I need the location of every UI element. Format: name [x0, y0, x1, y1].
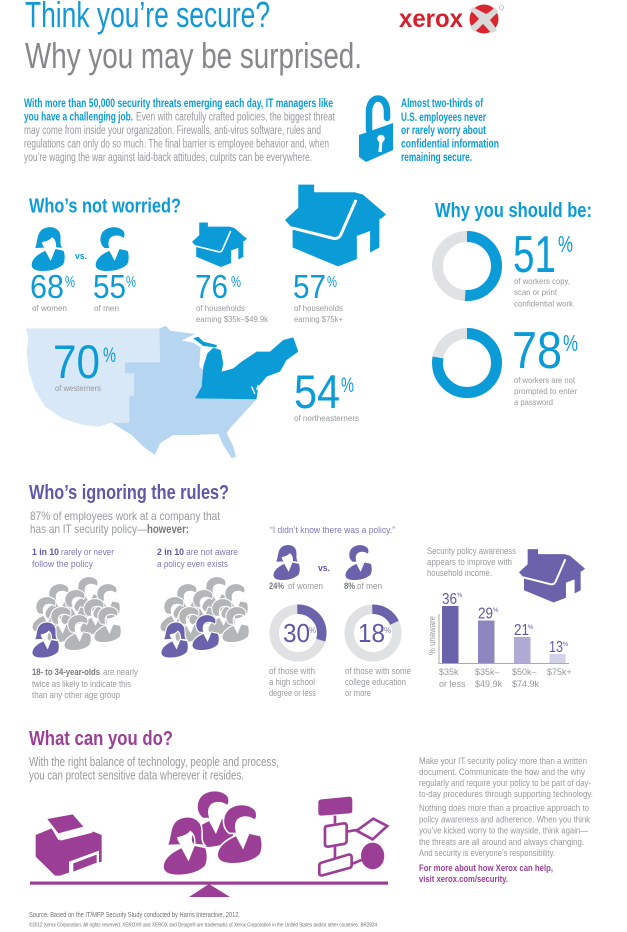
bar categories: $50k– [512, 667, 537, 677]
copyright: ©2012 Xerox Corporation. All rights reserved. XEROX® and XEROX and Design® are trademarks of Xerox Corporation in the United States and/or other countries. BR2824 [29, 922, 377, 928]
stat: 54% of northeasterners: of northeasterners [294, 413, 359, 423]
bar values: 13 [549, 639, 563, 656]
text: right balance: you can protect sensitive data wherever it resides. [29, 768, 244, 782]
text: 87% of employees: 87% of employees work at a company that [30, 509, 221, 523]
icon: people [164, 791, 261, 875]
text: right balance [29, 755, 279, 782]
stat: 70% of westerners: of westerners [55, 383, 101, 393]
bar categories [439, 667, 572, 689]
stat: 78% of workers: prompted to enter [514, 386, 577, 396]
text: 18- to 34-year-olds: than any other age group [32, 690, 120, 700]
stat: 57% of households: % [327, 274, 337, 291]
text: 87% of employees: has an IT security policy— [30, 522, 147, 536]
bar values: % [493, 608, 499, 614]
bar values: 36 [442, 591, 457, 608]
intro text: you have a challenging job. [24, 112, 133, 124]
stat: 70% of westerners: % [103, 344, 116, 367]
quote: didn't know: “I didn’t know there was a policy.” [270, 525, 395, 536]
stat: 51% of workers: confidential work [514, 298, 574, 308]
text: security policy awareness [427, 546, 516, 578]
text: 18- to 34-year-olds [32, 667, 138, 700]
bar values: % [528, 625, 534, 631]
text: 8% of men: of men [357, 581, 382, 591]
caption: high school: degree or less [269, 688, 316, 698]
icon: big house [285, 185, 386, 266]
stat: 78% of workers: a password [514, 397, 553, 407]
callout: two-thirds of employees: or rarely worry about [401, 125, 486, 137]
intro text: you’re waging the war against laid-back attitudes, culprits can be everywhere. [24, 152, 312, 164]
stat: 51% of workers [513, 226, 574, 308]
heading: who's not worried: Who’s not worried? [29, 196, 181, 218]
caption: some college: college education [345, 677, 406, 687]
text: 24% of women: of women [288, 581, 323, 591]
caption: high school: a high school [269, 677, 315, 687]
axis label: % unaware [427, 616, 437, 655]
icon: purple house [519, 549, 585, 603]
caption: some college [345, 666, 411, 698]
text: 1 in 10 [32, 547, 114, 569]
title: Why you may be surprised. [25, 35, 362, 76]
icon: man purple [346, 545, 372, 580]
bar categories: $35k– [475, 667, 500, 677]
callout: two-thirds of employees [401, 98, 499, 164]
stat: 51% of workers: % [558, 231, 573, 257]
crowd: one in ten [33, 577, 121, 658]
title [25, 0, 362, 76]
stat: 78% of workers: 78 [512, 322, 562, 380]
intro text: regulations can only do so much. The final barrier is employee behavior and, when [24, 138, 329, 150]
text: security policy awareness: Security policy awareness [427, 546, 516, 556]
caption: some college: of those with some [345, 666, 411, 676]
bar values: 29 [478, 606, 493, 622]
region: midwest and south [112, 326, 257, 458]
donut: 30%: % [309, 626, 316, 635]
stat: 76% of households: 76 [195, 268, 228, 305]
bar values [442, 591, 569, 656]
heading: who's ignoring the rules: Who’s ignoring the rules? [29, 482, 229, 504]
text: 87% of employees: however: [147, 522, 189, 536]
balance scale [30, 882, 388, 897]
icon: woman purple [274, 545, 300, 580]
icon: padlock [359, 98, 393, 162]
text: make your IT security policy [419, 756, 593, 858]
stat: 54% of northeasterners: 54 [294, 365, 340, 418]
text: make your IT security policy: to-day procedures through supporting technology. [419, 789, 593, 799]
donut: 18%: 18 [358, 618, 385, 648]
intro text: may come from inside your organization. Firewalls, anti-virus software, rules and [24, 125, 321, 137]
text: 24% of women [269, 581, 323, 591]
stat: 57% of households [293, 268, 343, 324]
donut: 18% [349, 609, 397, 657]
text: security policy awareness: appears to improve with [427, 557, 512, 567]
axis lines [439, 614, 569, 664]
donut: 30% [274, 609, 322, 657]
text: right balance: With the right balance of technology, people and process, [29, 755, 279, 769]
bar categories: $49.9k [475, 679, 503, 689]
source: Source: Based on the IT/MFP Security Study conducted by Harris Interactive, 2012. [29, 912, 240, 919]
bar values: % [563, 642, 569, 648]
region: northeast [193, 337, 298, 399]
stat: 68% of women: of women [32, 303, 67, 313]
text: make your IT security policy: document. Communicate the how and the why [419, 767, 585, 777]
text: make your IT security policy: And security is everyone’s responsibility. [419, 848, 555, 858]
intro text: Even with carefully crafted policies, the biggest threat [136, 112, 336, 124]
donut: 18%: % [384, 626, 391, 635]
icon: printer [36, 814, 102, 876]
stat: 68% of women: % [65, 274, 75, 291]
caption: high school [269, 666, 316, 698]
text: 2 in 10: a policy even exists [157, 559, 228, 569]
text: 18- to 34-year-olds: twice as likely to indicate this [32, 679, 131, 689]
icon: woman [32, 227, 65, 271]
bar categories: $75k+ [547, 667, 572, 677]
intro text: With more than 50,000 security threats emerging each day, IT managers like [24, 98, 333, 110]
stat: 76% of households: % [231, 274, 241, 291]
heading: what can you do: What can you do? [29, 728, 173, 750]
stat: 76% of households: earning $35k–$49.9k [196, 314, 269, 324]
label: vs purple: vs. [318, 563, 330, 573]
text: make your IT security policy: policy awareness and adherence. When you think [419, 814, 590, 824]
bar values: 21 [514, 622, 529, 639]
call to action [419, 863, 553, 884]
stat: 78% of workers: % [563, 330, 578, 356]
bar categories: or less [439, 679, 466, 689]
stat: 55% of men: 55 [93, 268, 126, 305]
text: 1 in 10: rarely or never [61, 547, 114, 557]
map: United States regions [26, 326, 298, 458]
callout: two-thirds of employees: remaining secure. [401, 152, 472, 164]
stat: 55% of men: of men [94, 303, 119, 313]
donut: 30%: 30 [283, 618, 310, 648]
stat: 68% of women: 68 [30, 268, 64, 305]
stat: 57% of households: 57 [293, 268, 326, 305]
caption: high school: of those with [269, 666, 315, 676]
icon: small house [192, 223, 247, 267]
text: make your IT security policy: regularly and require your policy to be part of day- [419, 778, 591, 788]
intro text [24, 98, 336, 164]
bar categories: $35k [439, 667, 459, 677]
text: 1 in 10: follow the policy [32, 559, 93, 569]
stat: 76% of households [195, 268, 269, 324]
text: 18- to 34-year-olds: are nearly [103, 667, 138, 677]
crowd: two in ten [161, 577, 249, 658]
callout: two-thirds of employees: confidential information [401, 138, 499, 150]
caption: some college: or more [345, 688, 371, 698]
stat: 55% of men: % [126, 274, 136, 291]
stat: 57% of households: of households [294, 303, 343, 313]
stat: 68% of women [30, 268, 75, 313]
bars [442, 606, 566, 663]
icon: man [96, 227, 129, 271]
donut: 78% [438, 334, 496, 392]
bar categories: $74.9k [512, 679, 540, 689]
text: 18- to 34-year-olds: 18- to 34-year-olds [32, 667, 100, 677]
text: make your IT security policy: Make your IT security policy more than a written [419, 756, 587, 766]
stat: 51% of workers: scan or print [514, 287, 558, 297]
heading: why you should be: Why you should be: [435, 200, 592, 222]
text: make your IT security policy: you’ve kicked worry to the wayside, think again— [419, 826, 589, 836]
text: 87% of employees [30, 509, 221, 536]
callout: two-thirds of employees: U.S. employees never [401, 112, 486, 124]
icon: flowchart [318, 797, 387, 875]
text: 1 in 10: 1 in 10 [32, 547, 59, 557]
text: security policy awareness: household income. [427, 568, 492, 578]
bar chart: percent unaware by income [427, 591, 572, 689]
text: 8% of men: 8% [344, 581, 355, 591]
text: 2 in 10: are not aware [186, 547, 238, 557]
text: 2 in 10 [157, 547, 238, 569]
stat: 51% of workers: 51 [513, 226, 556, 284]
text: 8% of men [344, 581, 382, 591]
callout: two-thirds of employees: Almost two-thirds of [401, 98, 483, 110]
stat: 57% of households: earning $75k+ [294, 314, 343, 324]
call to action: For more about how Xerox can help, [419, 863, 553, 873]
region: west [26, 328, 160, 427]
donut: 51% [438, 236, 496, 296]
label: vs: vs. [75, 251, 87, 261]
stat: 76% of households: of households [196, 303, 245, 313]
stat: 70% of westerners: 70 [53, 335, 100, 388]
text: make your IT security policy: the threats are all around and always changing. [419, 837, 584, 847]
logo: xerox: xerox [399, 5, 463, 33]
text: 2 in 10: 2 in 10 [157, 547, 184, 557]
stat: 78% of workers: of workers are not [514, 375, 576, 385]
logo: xerox [399, 4, 504, 34]
stat: 78% of workers [512, 322, 578, 407]
bar values: % [457, 593, 463, 599]
text: 24% of women: 24% [269, 581, 284, 591]
call to action: visit xerox.com/security. [419, 874, 508, 884]
stat: 54% of northeasterners: % [341, 374, 354, 397]
text: make your IT security policy: Nothing does more than a proactive approach to [419, 803, 589, 813]
stat: 51% of workers: of workers copy, [514, 276, 570, 286]
